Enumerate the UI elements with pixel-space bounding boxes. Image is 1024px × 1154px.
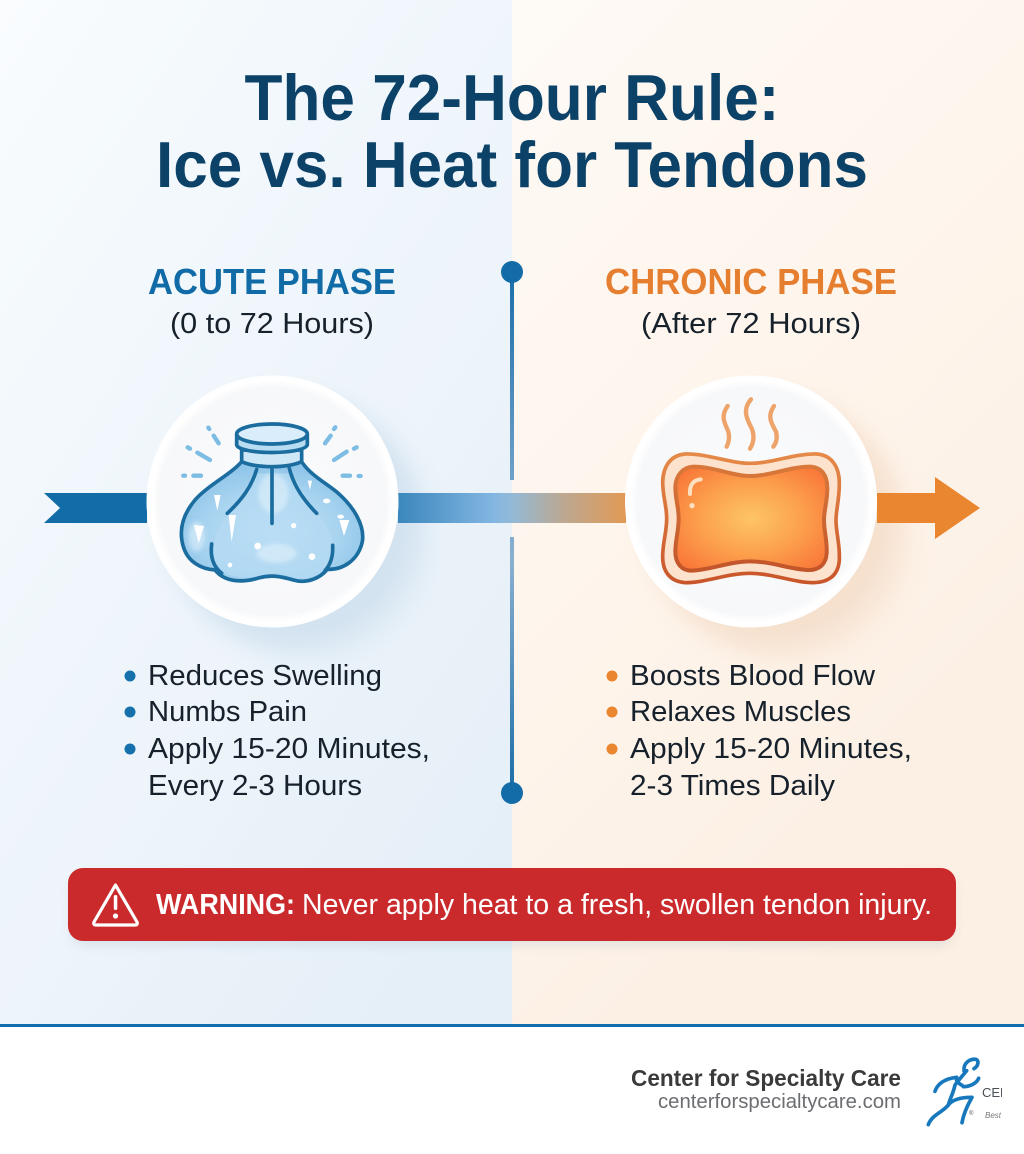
frost and icicles [194, 481, 349, 567]
footer brand text: Center for Specialty Care [631, 1065, 901, 1091]
bag neck and cap [242, 450, 302, 467]
title: Ice vs. Heat for Tendons [156, 128, 868, 201]
icon: running figure logo: ® [969, 1110, 974, 1117]
list: acute benefits: Every 2-3 Hours [148, 770, 362, 802]
front lobe [213, 473, 333, 578]
list: chronic benefits: 2-3 Times Daily [630, 770, 836, 802]
icon: running figure logo [928, 1059, 1009, 1125]
list: acute benefits [124, 660, 430, 802]
list: chronic benefits: Relaxes Muscles [630, 696, 851, 728]
icon: ice pack medallion [146, 376, 398, 628]
heading: acute phase: (0 to 72 Hours) [170, 308, 374, 340]
ice bag body [181, 462, 363, 581]
icon: running figure logo: CEN [982, 1085, 1009, 1100]
footer brand text: centerforspecialtycare.com [658, 1090, 901, 1113]
heading: chronic phase: CHRONIC PHASE [605, 261, 897, 302]
footer rule [0, 1024, 1024, 1027]
callout: warning: WARNING: [156, 889, 295, 921]
list: acute benefits: Numbs Pain [148, 696, 307, 728]
timeline divider [501, 261, 523, 804]
panel: chronic background [512, 0, 1024, 1024]
title [156, 61, 868, 201]
heat pad outer shell [663, 454, 839, 583]
medallion shadows [166, 395, 911, 661]
icon: heat pack medallion [625, 376, 877, 628]
icon: warning triangle [94, 885, 137, 925]
list: chronic benefits: Apply 15-20 Minutes, [630, 733, 912, 765]
heading: acute phase: ACUTE PHASE [148, 261, 396, 302]
steam [724, 399, 777, 449]
pad highlight [690, 479, 701, 494]
footer brand text [631, 1065, 901, 1113]
panel: acute background [0, 0, 512, 1024]
arrow: acute to chronic timeline [44, 477, 980, 539]
icon: running figure logo: Best [985, 1111, 1002, 1120]
footer band [0, 1024, 1024, 1154]
title: The 72-Hour Rule: [244, 61, 780, 134]
frost texture [188, 473, 297, 563]
heading: chronic phase: (After 72 Hours) [641, 308, 861, 340]
heat pad inner [675, 467, 827, 571]
heading: acute phase [148, 261, 396, 340]
list: chronic benefits [606, 660, 912, 802]
cold sparkle dashes [183, 427, 361, 476]
callout: warning: Never apply heat to a fresh, swollen tendon injury. [302, 889, 932, 921]
list: acute benefits: Reduces Swelling [148, 660, 382, 692]
list: chronic benefits: Boosts Blood Flow [630, 660, 876, 692]
callout: warning [68, 868, 956, 946]
heading: chronic phase [605, 261, 897, 340]
bag folds [211, 468, 333, 573]
list: acute benefits: Apply 15-20 Minutes, [148, 733, 430, 765]
